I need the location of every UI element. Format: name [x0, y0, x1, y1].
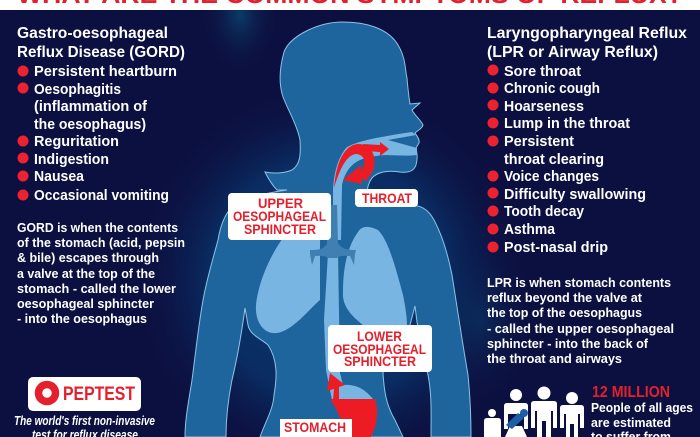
- label: lower oesophageal sphincter: SPHINCTER: [344, 353, 416, 369]
- stomach acid: [330, 399, 377, 437]
- statistic: 12 million: 12 MILLION: [592, 384, 670, 401]
- label: lower oesophageal sphincter: [328, 325, 432, 372]
- GORD description: GORD is when the contents: [17, 221, 178, 235]
- Peptest caption: [14, 414, 155, 437]
- GORD symptom list: Oesophagitis: [34, 82, 121, 98]
- throat airway: [333, 132, 417, 240]
- GORD description: oesophageal sphincter: [17, 297, 154, 311]
- icon: family of people: [484, 386, 584, 437]
- icon: baby: [506, 409, 528, 429]
- statistic: 12 million: are estimated: [591, 416, 671, 430]
- background: [170, 10, 507, 426]
- GORD symptom list: Persistent heartburn: [34, 64, 177, 80]
- GORD symptom bullets: [18, 66, 28, 200]
- LPR symptom list: Hoarseness: [504, 99, 584, 115]
- LPR symptom list: Persistent: [504, 134, 574, 150]
- LPR symptom list: Tooth decay: [504, 204, 584, 220]
- GORD heading: Gastro-oesophageal: [17, 25, 168, 42]
- LPR symptom list: Chronic cough: [504, 81, 600, 97]
- statistic: 12 million: [591, 384, 693, 437]
- LPR description: [487, 276, 674, 366]
- LPR description: the top of the oesophagus: [487, 306, 642, 320]
- label: upper oesophageal sphincter: SPHINCTER: [244, 221, 316, 237]
- LPR symptom list: Voice changes: [504, 169, 599, 185]
- GORD symptom list: Reguritation: [34, 134, 119, 150]
- GORD description: of the stomach (acid, pepsin: [17, 236, 185, 250]
- oesophagus: [324, 253, 373, 400]
- label: upper oesophageal sphincter: UPPER: [258, 195, 303, 211]
- GORD description: stomach - called the lower: [17, 282, 176, 296]
- arrow: throat to mouth: [363, 142, 389, 156]
- logo: Peptest: PEPTEST: [63, 384, 135, 405]
- GORD symptom list: Indigestion: [34, 152, 109, 168]
- panel: LPR: [487, 25, 687, 366]
- GORD symptom list: Nausea: [34, 169, 85, 185]
- LPR heading: [487, 25, 687, 61]
- logo: Peptest: [28, 377, 141, 411]
- GORD description: - into the oesophagus: [17, 312, 147, 326]
- body silhouette: [185, 22, 471, 437]
- LPR symptom list: Difficulty swallowing: [504, 187, 646, 203]
- panel: GORD: [17, 25, 185, 326]
- GORD symptom list: the oesophagus): [34, 117, 146, 133]
- LPR symptom list: Post-nasal drip: [504, 240, 608, 256]
- Peptest caption: The world's first non-invasive: [14, 414, 155, 428]
- GORD description: a valve at the top of the: [17, 267, 155, 281]
- right lung: [343, 227, 407, 326]
- LPR symptom list: Lump in the throat: [504, 116, 630, 132]
- LPR description: - called the upper oesophageal: [487, 322, 674, 336]
- label: lower oesophageal sphincter: LOWER: [357, 328, 402, 344]
- label: upper oesophageal sphincter: [228, 193, 331, 240]
- arrow: curved throat reflux: [334, 144, 375, 188]
- LPR symptom bullets: [488, 64, 498, 252]
- left lung: [256, 235, 320, 333]
- label: throat: THROAT: [362, 190, 412, 206]
- GORD description: & bile) escapes through: [17, 251, 159, 265]
- arrow: reflux up from stomach: [327, 373, 345, 400]
- LPR heading: (LPR or Airway Reflux): [487, 44, 658, 61]
- LPR symptom list: [504, 64, 646, 256]
- label: lower oesophageal sphincter: OESOPHAGEAL: [333, 341, 426, 357]
- statistic: 12 million: People of all ages: [591, 401, 693, 415]
- GORD symptom list: [34, 64, 177, 204]
- GORD heading: Reflux Disease (GORD): [17, 44, 185, 61]
- GORD symptom list: (inflammation of: [34, 99, 147, 115]
- LPR description: sphincter - into the back of: [487, 337, 649, 351]
- LPR symptom list: Asthma: [504, 222, 556, 238]
- bronchi: [310, 205, 356, 265]
- GORD heading: [17, 25, 185, 61]
- LPR description: the throat and airways: [487, 352, 622, 366]
- LPR heading: Laryngopharyngeal Reflux: [487, 25, 687, 42]
- label: stomach: STOMACH: [284, 419, 346, 435]
- GORD description: [17, 221, 185, 326]
- GORD symptom list: Occasional vomiting: [34, 188, 169, 204]
- LPR symptom list: Sore throat: [504, 64, 581, 80]
- LPR symptom list: throat clearing: [504, 152, 604, 168]
- LPR description: LPR is when stomach contents: [487, 276, 671, 290]
- LPR description: reflux beyond the valve at: [487, 291, 643, 305]
- label: upper oesophageal sphincter: OESOPHAGEAL: [233, 208, 326, 224]
